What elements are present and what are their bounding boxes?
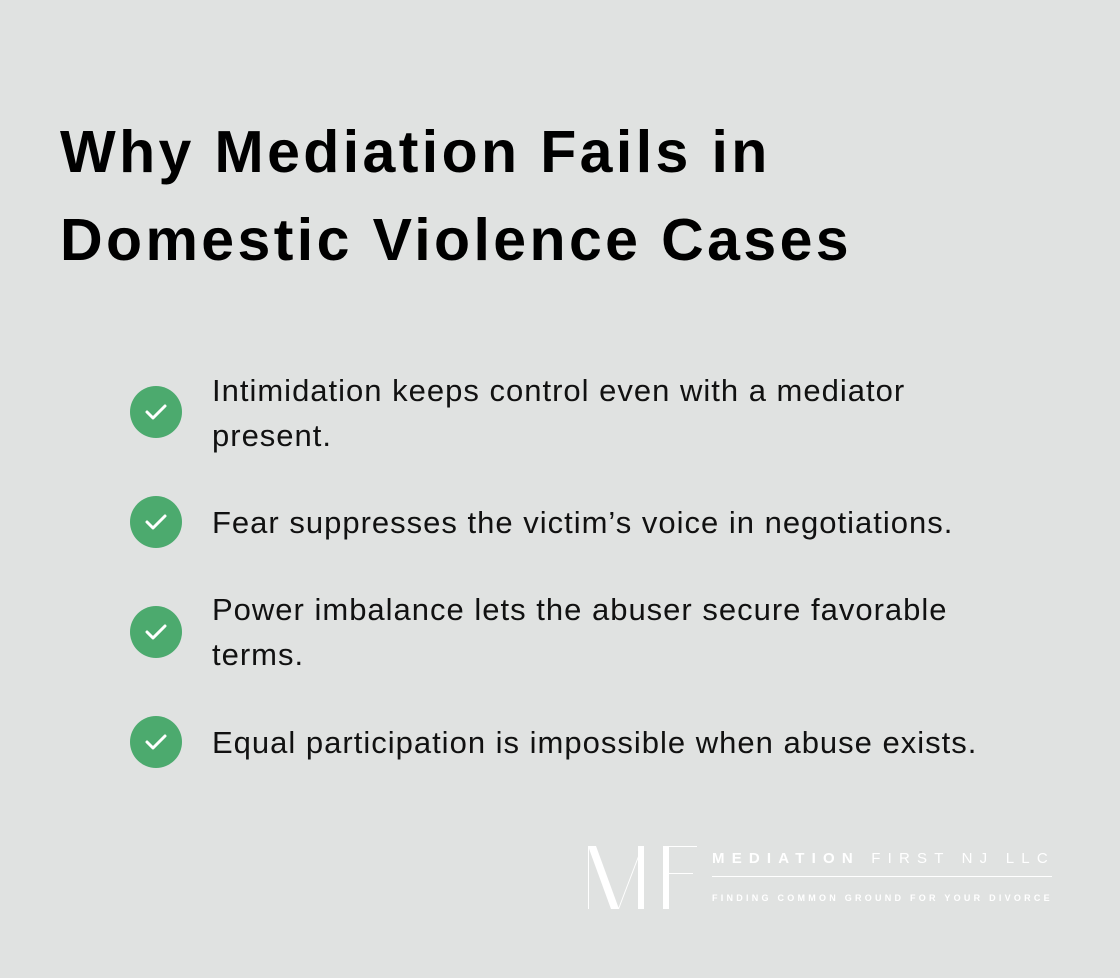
icon: check	[130, 716, 182, 768]
text: Power imbalance lets the abuser secure favorable	[212, 592, 948, 627]
text: Equal participation is impossible when abuse exists.	[212, 725, 977, 760]
item 4	[130, 716, 977, 768]
icon: check	[130, 606, 182, 658]
text: present.	[212, 418, 332, 453]
tagline: FINDING COMMON GROUND FOR YOUR DIVORCE	[712, 893, 1053, 903]
title: Domestic Violence Cases	[60, 207, 852, 273]
logo name: MEDIATION FIRST NJ LLC	[712, 850, 1055, 867]
icon: check	[130, 496, 182, 548]
title	[60, 119, 852, 273]
text	[212, 373, 905, 453]
text: terms.	[212, 637, 304, 672]
logo mark MF	[588, 846, 697, 909]
title: Why Mediation Fails in	[60, 119, 771, 185]
text: Fear suppresses the victim’s voice in negotiations.	[212, 505, 953, 540]
item 1	[130, 373, 905, 453]
logo	[588, 846, 1055, 909]
item 3	[130, 592, 948, 672]
icon: check	[130, 386, 182, 438]
item 2	[130, 496, 953, 548]
text	[212, 592, 948, 672]
text: Intimidation keeps control even with a mediator	[212, 373, 905, 408]
